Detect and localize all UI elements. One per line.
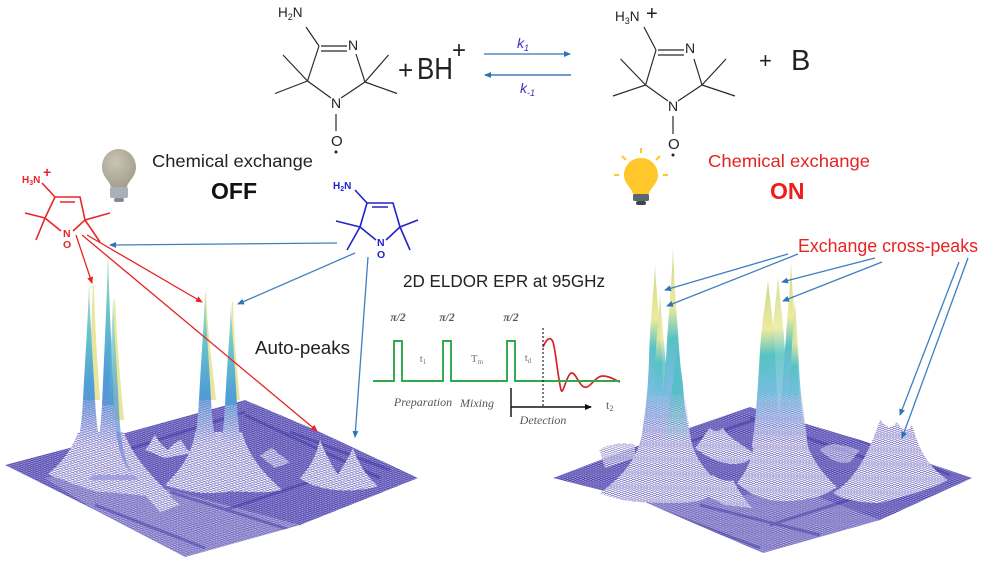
molecule: blue neutral — [333, 181, 418, 261]
molecule: protonated nitroxide: H — [615, 9, 625, 24]
phase labels: Preparation — [393, 395, 452, 409]
pi/2 labels: π/2 — [439, 312, 455, 324]
reagent: plus BH+: + — [452, 37, 466, 64]
arrows: cross-peak pointers — [665, 254, 968, 438]
molecule: neutral nitroxide: N — [348, 37, 358, 53]
chemical exchange off label — [102, 149, 313, 204]
surface plot: exchange on — [553, 248, 972, 553]
molecule: blue neutral: 2 — [340, 186, 344, 193]
text: exchange cross-peaks: Exchange cross-peaks — [798, 235, 978, 256]
molecule: neutral nitroxide: O — [331, 133, 343, 150]
base grid surface left — [5, 400, 418, 557]
molecule: red protonated — [22, 164, 110, 251]
dotted trigger line — [542, 328, 544, 407]
molecule: protonated nitroxide — [613, 3, 735, 156]
peak lattice overlay left — [63, 400, 257, 475]
molecule: blue neutral: H — [333, 181, 340, 192]
text: chemical exchange red: Chemical exchange — [708, 151, 870, 171]
molecule: neutral nitroxide: N — [331, 95, 341, 111]
time labels — [420, 352, 532, 366]
text: pulse title: 2D ELDOR EPR at 95GHz — [403, 271, 605, 291]
surface plot: exchange off — [5, 250, 418, 557]
equilibrium arrows: 1 — [524, 43, 529, 53]
green pulse line — [373, 341, 620, 381]
dark ridges right — [620, 418, 950, 548]
product: plus B: + — [759, 48, 772, 73]
molecule: protonated nitroxide: N — [685, 40, 695, 56]
molecule: red protonated: O — [63, 239, 71, 251]
pi/2 labels — [390, 312, 519, 324]
time labels: m — [478, 358, 484, 366]
molecule: protonated nitroxide: O — [668, 136, 680, 153]
small back peaks left — [145, 435, 192, 458]
skirts left — [48, 432, 172, 496]
arrows: red auto-peak pointers — [76, 235, 317, 431]
skirts right — [600, 435, 720, 503]
time labels: d — [528, 357, 532, 365]
molecule: protonated nitroxide: 3 — [625, 16, 630, 26]
mid-tone front lattice left — [45, 470, 300, 557]
icon: grey light bulb — [102, 149, 136, 202]
molecule: neutral nitroxide: H — [278, 5, 288, 20]
peak lattice overlay right — [640, 395, 808, 448]
molecule: red protonated: 3 — [29, 180, 33, 187]
chemical exchange on label — [614, 148, 870, 205]
molecule: blue neutral: N — [377, 237, 385, 249]
time labels: 1 — [423, 358, 427, 366]
t2 label: 2 — [609, 404, 613, 413]
reaction equation — [275, 3, 810, 156]
equilibrium arrows: k — [517, 35, 524, 51]
molecule: protonated nitroxide: + — [646, 3, 658, 25]
equilibrium arrows: k — [520, 80, 527, 96]
detection axis — [511, 388, 591, 417]
reagent: plus BH+: BH — [417, 51, 453, 86]
phase labels — [393, 395, 566, 427]
base grid surface right — [553, 407, 972, 553]
equilibrium arrows — [484, 35, 571, 98]
molecule: neutral nitroxide — [275, 5, 397, 154]
molecule: red protonated: N — [63, 228, 71, 240]
text: off: OFF — [211, 178, 257, 204]
arrows: blue auto-peak pointers — [110, 243, 368, 437]
molecule: neutral nitroxide: N — [293, 5, 303, 20]
reagent: plus BH+: + — [398, 55, 413, 85]
phase labels: Detection — [519, 413, 566, 427]
molecule: protonated nitroxide: N — [668, 98, 678, 114]
pulse sequence diagram — [373, 312, 620, 427]
molecule: blue neutral: O — [377, 249, 385, 261]
pi/2 labels: π/2 — [503, 312, 519, 324]
text: chemical exchange: Chemical exchange — [152, 151, 313, 171]
pi/2 labels: π/2 — [390, 312, 406, 324]
t2 label: t — [606, 398, 609, 412]
spike peaks right — [640, 248, 808, 445]
time labels: t — [525, 352, 528, 364]
red detected signal — [543, 339, 620, 391]
text: on: ON — [770, 178, 804, 204]
product: plus B: B — [791, 45, 810, 77]
reagent: plus BH+ — [398, 37, 466, 86]
molecule: neutral nitroxide: 2 — [288, 12, 293, 22]
icon: yellow light bulb — [614, 148, 668, 205]
molecule: red protonated: H — [22, 175, 29, 186]
molecule: protonated nitroxide: N — [630, 9, 640, 24]
molecule: red protonated: + — [43, 164, 51, 180]
mid-tone front lattice right — [600, 490, 880, 553]
text: auto-peaks: Auto-peaks — [255, 337, 350, 358]
equilibrium arrows: -1 — [527, 88, 535, 98]
dark ridges left — [95, 412, 390, 548]
product: plus B — [759, 45, 810, 77]
phase labels: Mixing — [459, 396, 494, 410]
time labels: t — [420, 353, 423, 365]
molecule: blue neutral: N — [344, 181, 351, 192]
time labels: T — [471, 353, 478, 365]
spike peaks left — [63, 250, 257, 480]
molecule: red protonated: N — [33, 175, 40, 186]
